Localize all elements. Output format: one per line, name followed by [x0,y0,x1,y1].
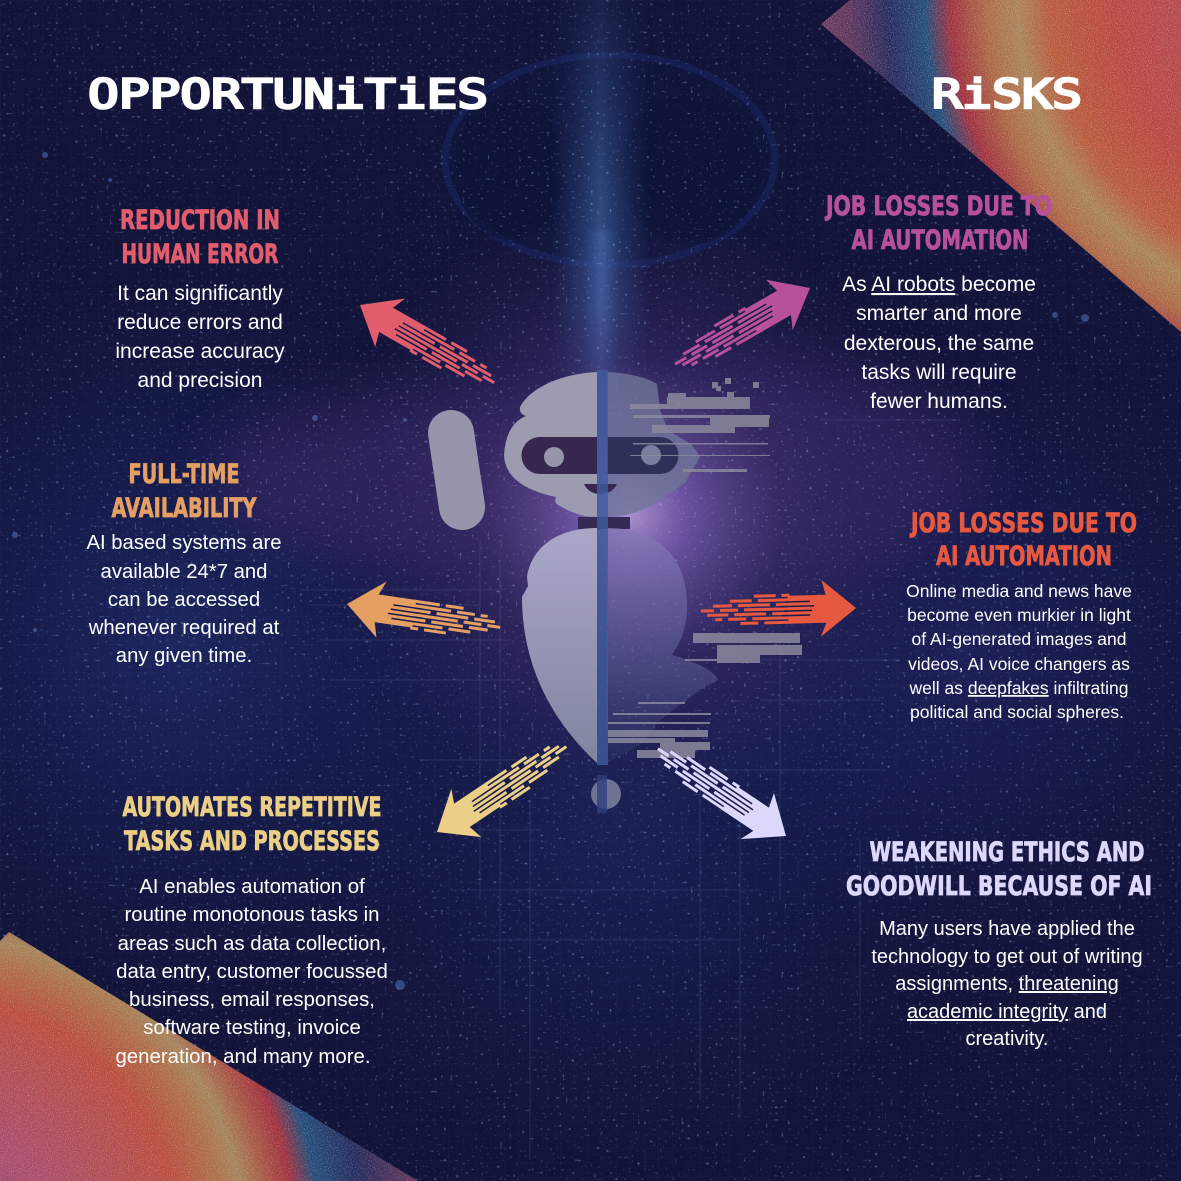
robot body, right half [607,528,718,763]
glitch fragments [608,378,802,758]
heading: JOB LOSSES DUE TO [824,191,1052,222]
arrow: automates repetitive tasks [421,723,582,856]
heading [824,191,1052,256]
body text: technology to get out of writing [871,946,1143,968]
panel: job losses [824,191,1052,413]
body text [115,282,285,392]
robot head, right half [607,372,700,517]
title: risks: RiSKS [932,72,1082,118]
panel: job losses, misinformation [906,508,1137,722]
heading: AI AUTOMATION [936,541,1112,572]
body text: creativity. [966,1028,1048,1050]
heading: AUTOMATES REPETITIVE [122,792,382,823]
robot illustration [451,370,802,813]
robot mouth [584,484,617,494]
robot arm [451,433,462,507]
body text: routine monotonous tasks in [124,904,380,926]
body text: whenever required at [88,617,280,639]
body text: software testing, invoice [143,1017,361,1039]
body text: well as deepfakes infiltrating [909,678,1128,698]
body text: business, email responses, [129,989,375,1011]
panel: full-time availability [86,459,282,667]
robot center divider [597,370,608,765]
arrow: job losses [661,263,824,389]
body text: assignments, threatening [895,973,1119,995]
body text: tasks will require [861,361,1017,384]
body text [906,581,1132,722]
robot body, left half [522,528,597,763]
body text: AI based systems are [86,532,282,554]
body text: As AI robots become [842,273,1036,296]
heading [909,508,1137,572]
heading [112,459,257,524]
heading [846,837,1152,902]
body text: fewer humans. [870,390,1008,413]
body text: data entry, customer focussed [116,961,388,983]
panel: automates repetitive tasks [115,792,388,1068]
decorative gradient corner: bottom left [0,920,430,1181]
body text: Online media and news have [906,581,1132,601]
heading [120,205,280,270]
body text [86,532,282,667]
arrow: full-time availability [343,576,504,655]
body text: academic integrity and [907,1001,1107,1023]
body text: It can significantly [117,282,283,305]
decorative gradient corner: top right [800,0,1181,340]
body text: increase accuracy [115,340,285,363]
body text [871,918,1143,1050]
panel: weakening ethics [846,837,1152,1050]
body text: any given time. [116,645,252,667]
robot head, left half [504,372,597,517]
body text: dexterous, the same [844,332,1034,355]
heading: AVAILABILITY [112,493,257,524]
body text: political and social spheres. [910,702,1124,722]
body text: reduce errors and [117,311,283,334]
panel: reduction in human error [115,205,285,392]
heading: AI AUTOMATION [852,225,1028,256]
body text: can be accessed [108,589,260,611]
title: opportunities: OPPORTUNiTiES [88,72,488,118]
robot base ball [591,775,621,813]
body text: of AI-generated images and [911,629,1127,649]
arrow: misinformation [700,579,857,640]
heading [122,792,382,857]
heading: REDUCTION IN [120,205,280,236]
body text: smarter and more [856,302,1022,325]
heading: TASKS AND PROCESSES [124,826,380,857]
body text: available 24*7 and [101,561,267,583]
arrow: reduction in human error [346,281,509,407]
body text: areas such as data collection, [118,933,386,955]
arrow: weakening ethics [642,725,802,859]
body text: AI enables automation of [139,876,365,898]
body text: generation, and many more. [115,1046,371,1068]
body text [842,273,1036,413]
body text: Many users have applied the [879,918,1135,940]
robot visor [522,437,597,474]
heading: FULL-TIME [128,459,240,490]
heading: HUMAN ERROR [122,239,279,270]
body text: videos, AI voice changers as [908,654,1130,674]
robot eyes [544,445,661,467]
body text: become even murkier in light [907,605,1131,625]
body text [115,876,388,1068]
body text: and precision [138,369,262,392]
robot neck [578,517,630,529]
